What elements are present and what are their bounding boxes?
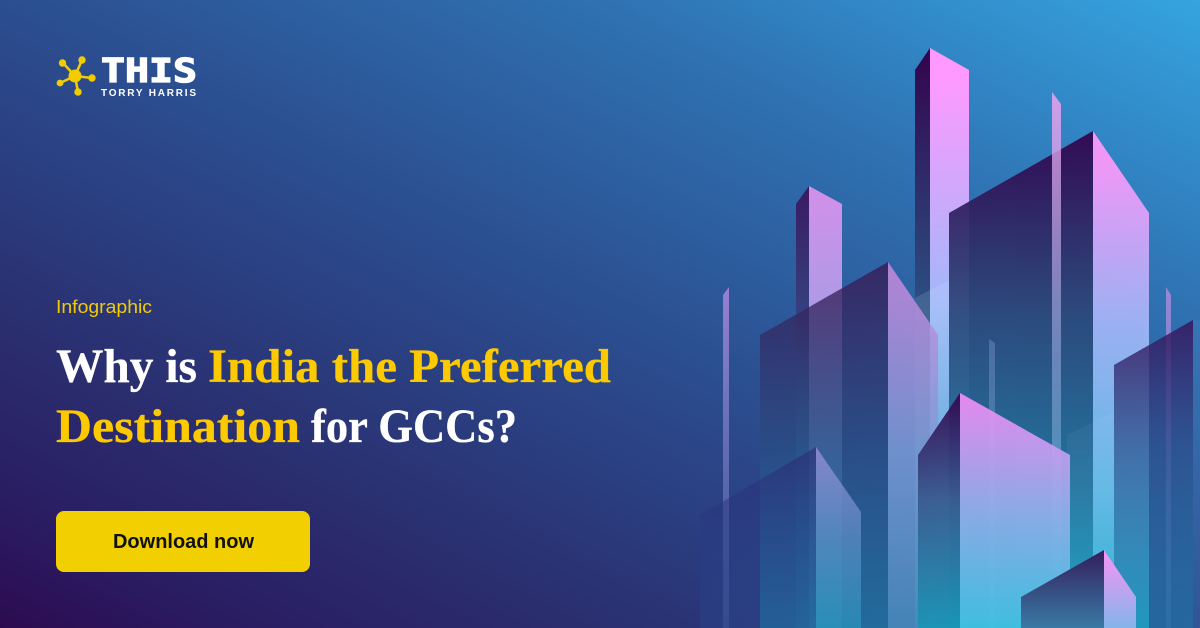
skyline illustration (700, 48, 1200, 628)
building: faint rear block (915, 280, 949, 628)
button: download now (56, 511, 310, 572)
building: right edge block (1114, 320, 1200, 628)
logo wordmark: THIS (101, 51, 197, 90)
logo (57, 51, 197, 99)
building: translucent front left block (700, 447, 861, 628)
building: large main block (949, 131, 1149, 628)
eyebrow label: Infographic (56, 297, 152, 317)
building: thin far left (723, 287, 729, 628)
building: thin far right (1166, 287, 1171, 628)
title: Why is (56, 340, 197, 393)
building: thin faint centre spire (989, 339, 995, 628)
icon: network node (57, 56, 96, 96)
title: Destination (56, 400, 300, 453)
building: faint overlay block (1067, 412, 1114, 628)
title: India the Preferred (208, 340, 611, 393)
building: centre front block (918, 393, 1070, 628)
building: thin spire over main block (1052, 92, 1061, 628)
button: download now: Download now (113, 531, 254, 553)
building: tallest tower (915, 48, 969, 628)
title (56, 340, 611, 453)
building: small front block (1021, 550, 1136, 628)
building: rear left tower (796, 186, 842, 628)
title: for GCCs? (311, 400, 517, 453)
building: mid left block (760, 262, 938, 628)
logo sub-wordmark: TORRY HARRIS (101, 88, 196, 99)
